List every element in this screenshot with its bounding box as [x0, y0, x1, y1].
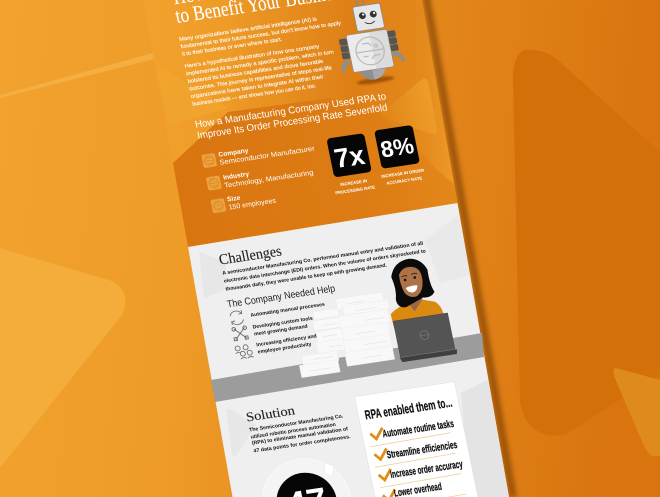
list: company needs: meet growing demand	[254, 324, 308, 338]
list: company needs: Developing custom tools to	[252, 315, 319, 331]
stat: 8%: ACCURACY RATE	[386, 175, 423, 186]
icon: people	[234, 344, 254, 360]
solution text: 47 data points for order completeness.	[253, 434, 352, 454]
intro text: Here's a hypothetical illustration of how one company	[184, 44, 320, 70]
list: company needs: employee productivity	[257, 342, 312, 355]
woman illustration	[380, 255, 450, 352]
stat: 8%: 8%	[378, 132, 416, 163]
solution text: utilized robotic process automation	[250, 422, 336, 441]
challenges heading: Challenges	[218, 244, 283, 269]
intro text: Many organizations believe artificial intelligence (AI) is	[179, 17, 318, 43]
company facts: Semiconductor Manufacturer	[219, 146, 316, 167]
subheading: Improve Its Order Processing Rate Sevenfold	[196, 103, 388, 142]
panel: light background	[188, 203, 509, 497]
intro text: organizations have taken to integrate AI within their	[190, 74, 324, 100]
the company needed help heading: The Company Needed Help	[226, 283, 337, 310]
stat: 8%	[372, 125, 426, 186]
intro text: outcomes. This journey is representative of steps real-life	[189, 65, 332, 93]
list: company needs	[227, 298, 333, 360]
intro text: it to their business or even where to start.	[182, 37, 283, 58]
company facts: Company	[218, 147, 249, 159]
company facts: Size	[227, 195, 241, 203]
challenges text: electronic data interchange (EDI) orders. When the volume of orders skyrocketed to	[223, 248, 426, 285]
check marks	[369, 428, 397, 497]
card: RPA enabled them to: Streamline efficiencies	[386, 439, 458, 461]
panel shadow	[422, 0, 517, 497]
challenges text	[222, 241, 428, 293]
card: RPA enabled them to: Automate routine tasks	[381, 418, 455, 440]
panel: orange header background	[143, 0, 458, 247]
solution text: (RPA) to eliminate manual validation of	[251, 426, 349, 447]
robot illustration	[328, 0, 409, 88]
card: RPA enabled them to	[355, 382, 494, 497]
donut chart: 47	[254, 453, 359, 497]
icon: company	[201, 153, 217, 168]
challenges text: thousands daily, they were unable to keep up with growing demand.	[225, 263, 388, 293]
laptop	[392, 313, 458, 362]
intro text: business models — and shows how you can do it, too.	[192, 83, 317, 108]
grey counter strip	[211, 333, 484, 402]
card: RPA enabled them to: RPA enabled them to...	[363, 395, 453, 422]
list: company needs: Increasing efficiency and	[256, 333, 317, 348]
challenges text: A semiconductor Manufacturing Co. performed manual entry and validation of all	[222, 241, 424, 277]
company facts	[201, 138, 325, 214]
stat: 7x: INCREASE IN	[340, 178, 368, 187]
solution heading: Solution	[245, 402, 297, 424]
icon: industry	[206, 175, 222, 191]
stat: 7x: PROCESSING RATE	[335, 185, 376, 195]
company facts: Technology, Manufacturing	[224, 170, 314, 190]
solution text: The Semiconductor Manufacturing Co.	[249, 413, 344, 433]
icon: size	[210, 198, 226, 213]
company facts: Industry	[223, 171, 250, 182]
list: company needs: Automating manual processes	[250, 302, 326, 319]
solution text	[249, 413, 352, 454]
stat: 7x: 7x	[332, 140, 367, 174]
stat: 7x	[324, 133, 376, 195]
intro text: bolstered its business capabilities and drove favorable	[187, 59, 324, 85]
stat: 8%: INCREASE IN ORDER	[381, 168, 425, 179]
icon: refresh	[229, 310, 244, 325]
intro text	[179, 13, 354, 108]
card: RPA enabled them to: Increase order accuracy	[389, 458, 464, 481]
stacks of paper	[287, 291, 401, 378]
icon: tools	[232, 326, 249, 341]
transformed infographic content	[157, 0, 510, 497]
company facts: 150 employees	[228, 198, 277, 212]
subheading: How a Manufacturing Company Used RPA to	[194, 91, 388, 131]
intro text: fundamental to their future success, but don't know how to apply	[180, 20, 342, 50]
intro text: implemented AI to remedy a specific problem, which in turn	[186, 49, 334, 77]
